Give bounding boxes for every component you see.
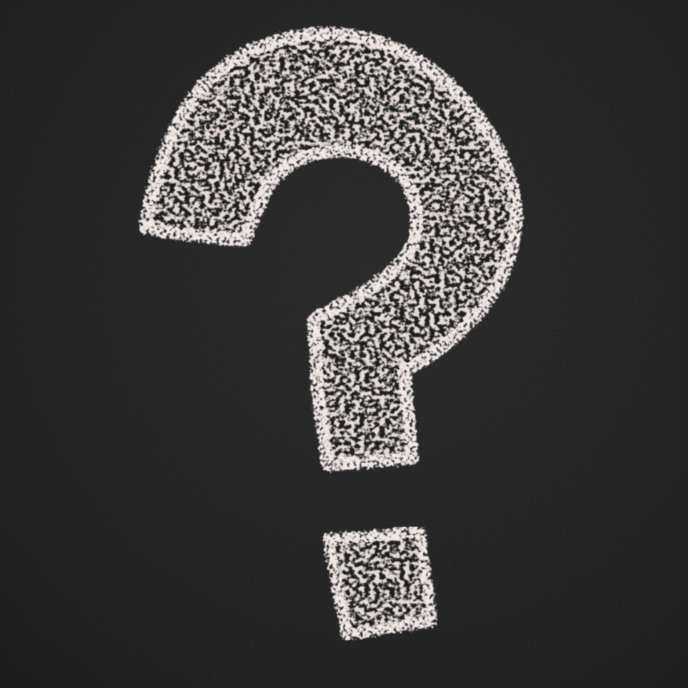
icon: chalk question mark hook and stem: [146, 33, 516, 465]
icon: chalk question mark dot: [328, 532, 432, 635]
